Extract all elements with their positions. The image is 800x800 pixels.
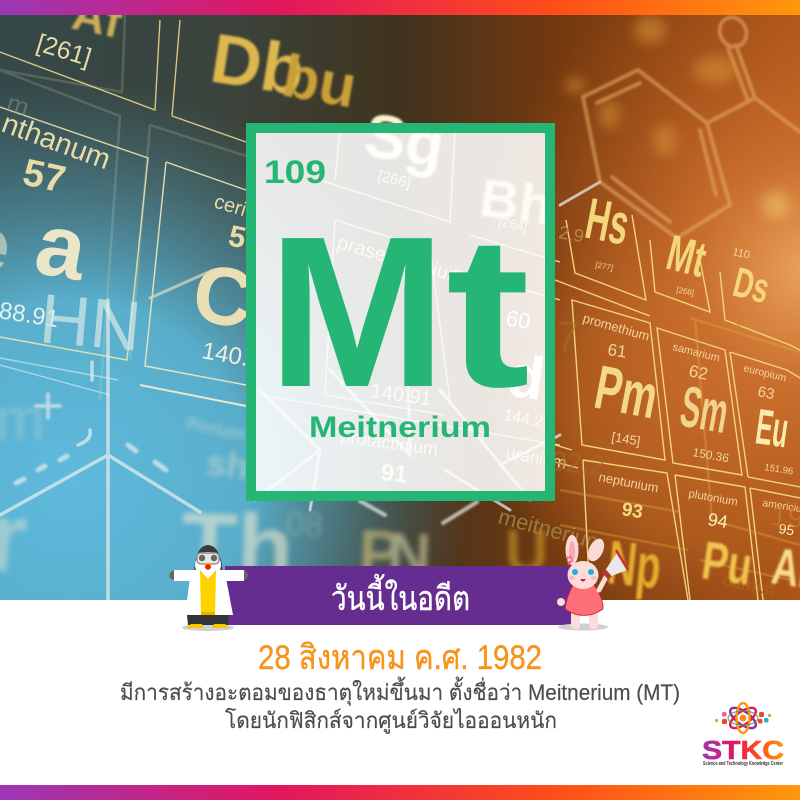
right element small labels: promethium (581, 310, 651, 344)
right element small labels: 94 (706, 509, 729, 532)
blurred symbols lower left: U (505, 518, 548, 585)
left element labels: a (29, 193, 95, 299)
blurred actinide symbols: Pu (698, 529, 756, 596)
right element small labels: [145] (611, 429, 641, 448)
blurred glints (565, 16, 790, 219)
right element small labels: [268] (676, 285, 695, 298)
right element symbols: Eu (752, 399, 792, 459)
card frame (251, 128, 550, 496)
right element small labels: 62 (687, 361, 710, 384)
left element labels (0, 29, 259, 372)
right element small labels (549, 222, 800, 600)
description text (120, 677, 680, 734)
labels behind card: [264] (497, 213, 529, 235)
right element symbols: Hs (580, 186, 634, 258)
labels behind card: [266] (376, 167, 413, 192)
gold symbols top: Bh (476, 167, 556, 237)
labels behind card: d (503, 342, 549, 413)
element symbol: M (268, 191, 446, 432)
labels behind card: uranium (504, 443, 568, 473)
gold symbols top (70, 15, 545, 224)
right element small labels: 95 (778, 520, 796, 538)
icon: atom (715, 703, 771, 733)
right element small labels: 151.96 (764, 462, 794, 478)
left element labels: [261] (33, 29, 95, 72)
right element small labels: 63 (756, 383, 776, 403)
left element labels: 57 (19, 152, 69, 202)
labels behind card: 91 (379, 459, 409, 489)
right element symbols: Mt (661, 224, 712, 288)
right element small labels: neptunium (597, 469, 660, 496)
gold symbols top: Sg (360, 101, 449, 181)
description text: มีการสร้างอะตอมของธาตุใหม่ขึ้นมา ตั้งชื่อว่า Meitnerium (MT) (120, 677, 680, 706)
left element labels: nthanum (0, 108, 115, 176)
right element small labels: 2.9 (557, 222, 585, 246)
left element labels: C (187, 248, 259, 346)
labels behind card: 144.24 (502, 407, 554, 432)
right element symbols: Pm (589, 353, 663, 433)
left element labels: m (3, 87, 33, 122)
blurred symbols lower left: sh (204, 441, 251, 488)
right element small labels: 93 (620, 499, 644, 523)
labels behind card: 60 (504, 305, 533, 334)
element symbol: t (446, 191, 530, 432)
left element labels: HN (37, 279, 144, 366)
meitnerium faint label: meitnerium (496, 504, 607, 556)
date heading: 28 สิงหาคม ค.ศ. 1982 (258, 639, 542, 677)
atomic number: 109 (264, 154, 326, 190)
description text: โดยนักฟิสิกส์จากศูนย์วิจัยไอออนหนัก (225, 708, 557, 734)
blurred symbols lower left (0, 406, 548, 574)
right element symbols: Ds (729, 258, 774, 313)
element card (251, 128, 550, 496)
right element small labels: 110 (731, 246, 751, 262)
gold symbols top: Db (206, 19, 310, 110)
banner title: วันนี้ในอดีต (331, 574, 470, 618)
logo wordmark: STKC (702, 735, 784, 765)
background photo: periodic table (0, 0, 800, 603)
right element symbols (585, 198, 788, 448)
labels behind card: 140.91 (369, 380, 433, 410)
blurred actinide symbols (608, 540, 800, 600)
blurred symbols lower left: P (358, 516, 403, 589)
bottom gradient bar (0, 785, 800, 800)
icon: penguin scientist (169, 545, 248, 631)
right element small labels: darmst (721, 570, 776, 600)
logo: STKC (702, 703, 784, 767)
gold symbols top: bu (278, 42, 362, 121)
element symbol (268, 191, 530, 432)
blurred symbols lower left: 08 (285, 505, 324, 545)
labels behind card (335, 167, 568, 489)
blurred symbols lower left: thorium (184, 412, 247, 444)
left grid lines (0, 20, 246, 406)
left element labels: ceri (212, 191, 249, 221)
blurred symbols lower left: Th (179, 494, 295, 600)
right molecule (583, 13, 800, 238)
right element small labels: 61 (606, 340, 628, 362)
right element small labels: plutonium (687, 488, 739, 509)
element name: Meitnerium (309, 411, 491, 444)
right element small labels: 7 (554, 312, 581, 361)
right element small labels: 92.2 (549, 445, 607, 482)
labels behind card: protactinium (339, 426, 439, 460)
left element labels: 5 (226, 220, 249, 255)
labels behind card: praseodymium (335, 232, 467, 289)
right element small labels: [277] (595, 260, 614, 273)
blurred actinide symbols: Np (605, 529, 664, 603)
right element small labels: samarium (671, 341, 721, 365)
right element small labels: europium (742, 362, 788, 385)
right element small labels: platinum (734, 312, 789, 339)
icon: rabbit with megaphone (557, 535, 628, 630)
left element labels: 140. (200, 337, 251, 372)
right element symbols: Sm (676, 373, 733, 446)
right element grid (555, 215, 800, 600)
blurred symbols lower left: N (387, 520, 432, 589)
purple banner (225, 566, 571, 625)
right element small labels: 150.36 (691, 445, 730, 465)
blue molecule (0, 182, 600, 600)
top gradient bar (0, 0, 800, 15)
